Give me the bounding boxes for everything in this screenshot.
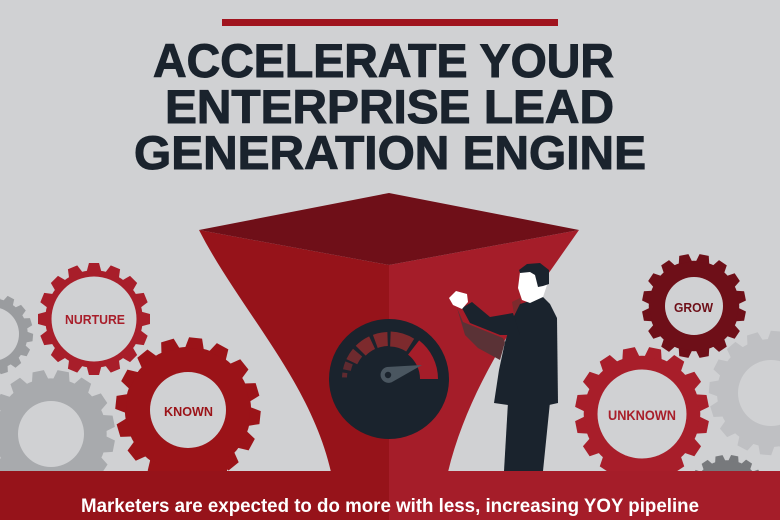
gear: dark grey bottom right	[680, 448, 774, 520]
top accent bar	[222, 19, 558, 26]
gauge needle	[381, 365, 422, 383]
title: ENTERPRISE LEAD	[165, 80, 614, 133]
label: known: KNOWN	[164, 404, 213, 419]
gear: grey upper left	[0, 290, 36, 378]
funnel	[199, 193, 579, 472]
funnel top opening	[199, 193, 579, 265]
title	[134, 34, 646, 179]
hand	[449, 291, 468, 309]
tie	[512, 298, 521, 314]
funnel right face	[389, 230, 579, 472]
gauge segments	[344, 339, 429, 379]
funnel left face	[199, 230, 389, 472]
gear: grey lower left	[0, 359, 126, 509]
base band	[0, 471, 780, 520]
gear: known	[108, 330, 268, 490]
jacket	[494, 297, 558, 405]
gear: nurture	[38, 263, 150, 375]
label: unknown: UNKNOWN	[608, 408, 676, 423]
legs	[504, 402, 550, 471]
label: nurture: NURTURE	[65, 312, 125, 327]
title: ACCELERATE YOUR	[153, 34, 614, 87]
band caption: Marketers are expected to do more with less, increasing YOY pipeline	[81, 496, 699, 517]
gear: grey right	[704, 326, 780, 460]
arm motion shadow	[457, 308, 505, 360]
hair	[519, 263, 549, 287]
speedometer gauge	[329, 319, 449, 439]
gear: unknown	[563, 335, 721, 493]
gear: grow	[633, 245, 755, 367]
face	[518, 272, 547, 303]
title: GENERATION ENGINE	[134, 126, 646, 179]
label: grow: GROW	[674, 300, 714, 315]
businessman	[449, 263, 558, 471]
arm	[462, 302, 520, 335]
